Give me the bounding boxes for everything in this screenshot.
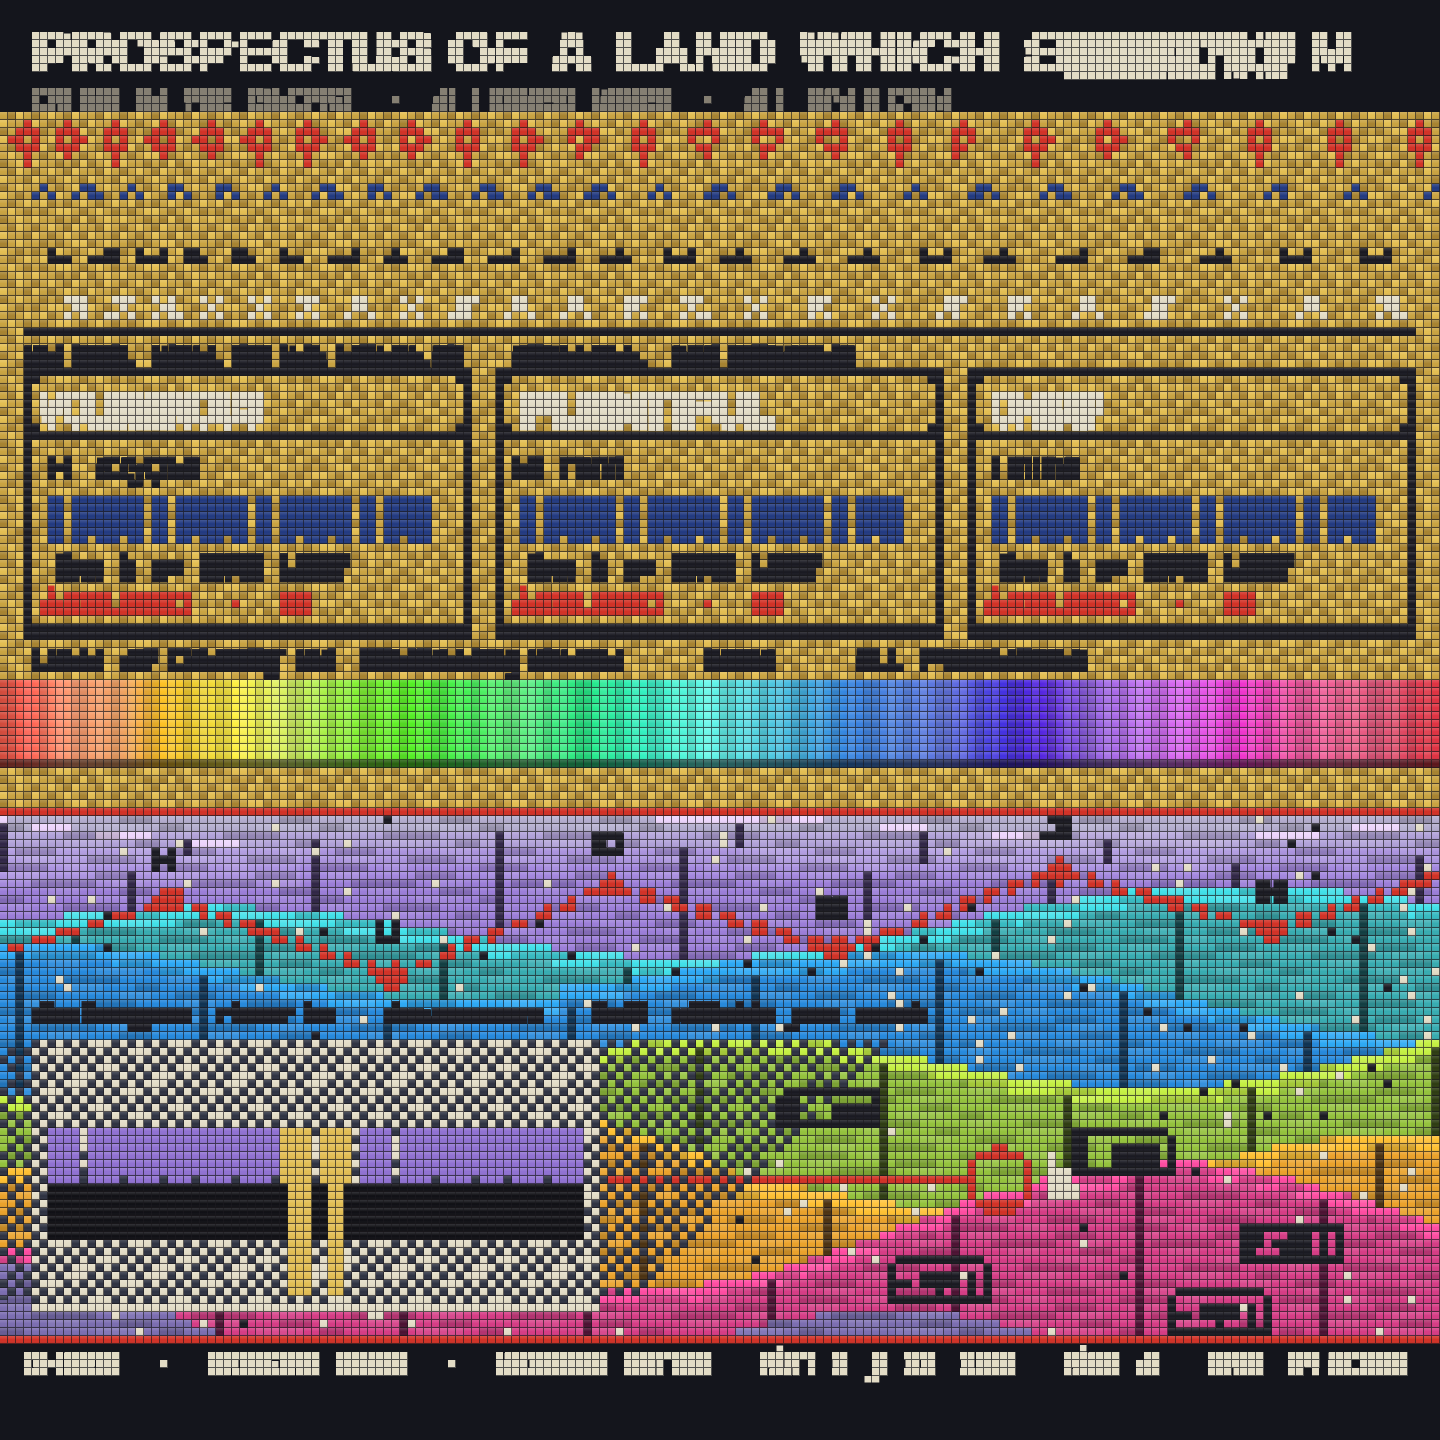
- section heading: and lands,: [24, 339, 136, 375]
- footer: PART: [760, 1346, 816, 1383]
- section heading: and: [672, 339, 720, 375]
- gold page body: [0, 112, 1440, 808]
- label: river strip: the longest: [32, 1003, 192, 1030]
- ornament row: blue chevrons: [32, 184, 1440, 200]
- panel heading: VOLUMINOUS: [40, 385, 264, 434]
- red note: ASSURED: [512, 587, 664, 623]
- layer tone texture: [0, 816, 1440, 1336]
- section heading: river beds,: [232, 339, 328, 375]
- panel label: KNOWN: [200, 555, 264, 582]
- label: river strip: per: [792, 1003, 840, 1030]
- section heading: [24, 339, 856, 375]
- map labels: [32, 811, 1288, 1030]
- gold markers: [280, 1128, 352, 1296]
- label: peak letters: U: [376, 915, 400, 951]
- red note: [40, 587, 312, 623]
- panel: plentiful: [496, 368, 944, 640]
- dither ground: [32, 1040, 600, 1312]
- panel label: [992, 449, 1288, 582]
- subtitle: SOLD: [808, 78, 880, 140]
- layer: water: [0, 944, 1440, 1360]
- label: river strip: Hillside: [672, 1003, 776, 1030]
- label: peak letters: M: [816, 891, 848, 927]
- purple band: [48, 1128, 584, 1184]
- caption line above spectrum: [32, 643, 1088, 679]
- subtitle: THE: [184, 78, 232, 140]
- red rule bottom: [0, 1336, 1440, 1344]
- panel label: no: [152, 555, 184, 582]
- panel label: mine: [1008, 449, 1080, 485]
- label: peak letters: J: [1040, 811, 1072, 847]
- title: EEMINGLY: [1064, 22, 1224, 84]
- panel label: no: [1096, 555, 1128, 582]
- footer: 11: [904, 1346, 936, 1383]
- panel label: [512, 449, 816, 582]
- subtitle: ALL: [744, 78, 792, 140]
- subtitle: IN: [136, 78, 168, 140]
- text: FOR 1: [888, 78, 952, 140]
- caption line above spectrum: Mattocks;: [360, 643, 520, 679]
- footer: WATERS: [624, 1346, 712, 1383]
- label: river strip: the western: [384, 1003, 544, 1030]
- label: peak letters: [152, 811, 1288, 951]
- red note: [984, 587, 1256, 623]
- panel label: oxygen: [96, 449, 200, 485]
- spectrum band: [0, 680, 1440, 768]
- subtitle: PARTS: [248, 78, 352, 140]
- panel label: is: [120, 555, 136, 582]
- panel heading: PLENTIFUL: [520, 385, 776, 434]
- footer: OH GOV: [24, 1346, 120, 1383]
- panel label: H: [48, 449, 72, 485]
- panel label: KNOWN: [1144, 555, 1208, 582]
- section heading: bottoms, etc: [336, 339, 464, 375]
- black band: [48, 1184, 584, 1240]
- panel label: LIMIT: [752, 555, 816, 582]
- title: A: [552, 22, 592, 84]
- footer: /: [872, 1346, 888, 1383]
- footer: PAGE: [1064, 1346, 1120, 1383]
- panel frame: [496, 368, 944, 640]
- panel frame: [968, 368, 1416, 640]
- layer: teal: [0, 888, 1440, 1360]
- footer: MINES: [336, 1346, 408, 1383]
- ornament row: cream marks: [64, 296, 1408, 320]
- layer: meadow: [0, 1040, 1440, 1360]
- posts: [0, 824, 1440, 1336]
- red note: ASSURED: [40, 587, 192, 623]
- panel label: I: [992, 449, 1000, 485]
- caption line above spectrum: of: [120, 643, 152, 679]
- caption line above spectrum: streams: [528, 643, 624, 679]
- section heading: minerals: [728, 339, 856, 375]
- mountain peak: [1048, 1152, 1080, 1200]
- panel: cheap: [968, 368, 1416, 640]
- footer: [24, 1346, 1408, 1383]
- red note: [512, 587, 784, 623]
- deed panel: [32, 1040, 600, 1312]
- label: peak letters: H: [1256, 875, 1288, 911]
- divider rule: [24, 328, 1416, 336]
- scatter dots cream: [48, 816, 1440, 1336]
- footer ground: [0, 1344, 1440, 1440]
- ornament row: dark bars: [48, 248, 1392, 264]
- subtitle: ALL RIVER: [432, 78, 576, 140]
- title: PROSPECTUS: [32, 22, 432, 84]
- label: peak letters: D: [592, 827, 624, 863]
- terrain map: [0, 816, 1440, 1360]
- panel label: is: [592, 555, 608, 582]
- subtitle: [32, 78, 952, 140]
- layer: sky: [0, 816, 1440, 980]
- hatch overlay: [0, 1040, 888, 1300]
- panel label: no: [624, 555, 656, 582]
- label: peak letters: H: [152, 843, 176, 879]
- footer: 1846: [960, 1346, 1016, 1383]
- footer: WHOLESOME: [496, 1346, 608, 1383]
- section heading: mines,: [152, 339, 224, 375]
- panel label: rent: [560, 449, 624, 485]
- panel label: LIMIT: [280, 555, 344, 582]
- footer: BY: [1288, 1346, 1320, 1383]
- label: river strip: [32, 1003, 928, 1030]
- subtitle: FOUND: [32, 78, 120, 140]
- big value bars: [48, 496, 432, 544]
- caption line above spectrum: Calamity: [168, 643, 280, 679]
- big value bars: [992, 496, 1376, 544]
- panel label: [48, 449, 344, 582]
- panel heading: CHEAP: [992, 385, 1104, 434]
- title: RICH: [1224, 30, 1288, 83]
- subtitle: MINES: [592, 78, 672, 140]
- footer: OVER: [1208, 1346, 1264, 1383]
- panel label: KNOWN: [672, 555, 736, 582]
- title: S: [1024, 22, 1072, 84]
- title: LAND: [616, 22, 776, 84]
- footer: 3: [832, 1346, 848, 1383]
- red note: ASSURED: [984, 587, 1136, 623]
- panel label: LIMIT: [1224, 555, 1288, 582]
- big value bars: [520, 496, 904, 544]
- label: river strip: lull: [592, 1003, 648, 1030]
- caption line above spectrum: Lands: [32, 643, 104, 679]
- footer: 4: [1136, 1346, 1161, 1383]
- panel frame: [24, 368, 472, 640]
- caption line above spectrum: ALL: [856, 643, 904, 679]
- caption line above spectrum: Provisions: [920, 643, 1088, 679]
- layer: foothills: [0, 1120, 1440, 1360]
- layer: highlands: [0, 1160, 1440, 1360]
- title: WHICH: [800, 22, 1000, 84]
- ring marker and leader line: [608, 1144, 1032, 1216]
- title: /: [1280, 22, 1296, 84]
- callout boxes: [776, 1088, 1344, 1336]
- trend line chart: [8, 856, 1440, 992]
- title: [32, 22, 1352, 84]
- ornament row: red crosses: [8, 120, 1432, 168]
- label: river strip: month: [856, 1003, 928, 1030]
- panel: voluminous: [24, 368, 472, 640]
- red rule top: [0, 808, 1440, 816]
- layer: lowlands: [0, 1264, 1032, 1336]
- footer: WORKING: [208, 1346, 320, 1383]
- panel label: is: [1064, 555, 1080, 582]
- scatter dots dark: [104, 816, 1392, 1328]
- caption line above spectrum: hum: [704, 643, 776, 679]
- title: M: [1312, 22, 1352, 84]
- panel label: there: [56, 555, 104, 582]
- panel label: there: [528, 555, 576, 582]
- caption line above spectrum: and: [296, 643, 336, 679]
- label: river strip: river in: [216, 1003, 336, 1030]
- panel label: Mt: [512, 449, 544, 485]
- section heading: streams,: [512, 339, 648, 375]
- panel label: there: [1000, 555, 1048, 582]
- title: OF: [448, 22, 528, 84]
